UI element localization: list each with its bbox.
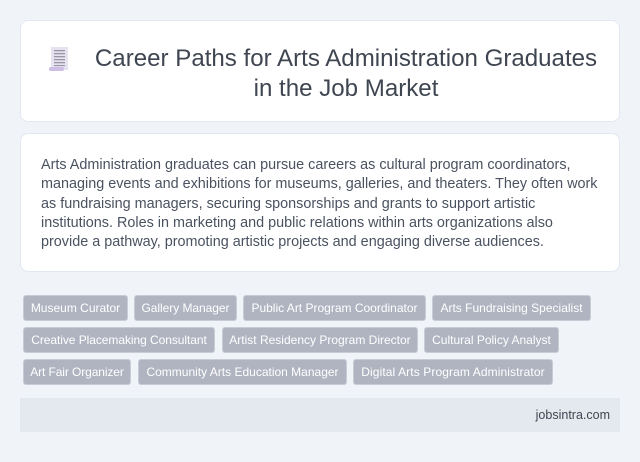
tag [138, 359, 347, 385]
tag: Creative Placemaking Consultant [31, 333, 207, 347]
tag: Public Art Program Coordinator [251, 301, 418, 315]
tag [243, 295, 426, 321]
tag: Cultural Policy Analyst [432, 333, 551, 347]
title: Career Paths for Arts Administration Graduates [95, 45, 597, 72]
tag [134, 295, 237, 321]
tag: Art Fair Organizer [30, 365, 124, 379]
tag [353, 359, 553, 385]
icon: document scroll [49, 47, 68, 71]
tag: Digital Arts Program Administrator [361, 365, 545, 379]
tag [23, 295, 128, 321]
tag list [23, 295, 591, 385]
panel: title card [20, 20, 620, 122]
tag: Gallery Manager [142, 301, 229, 315]
text block: description [41, 157, 598, 250]
text block: description: managing events and exhibitions for museums, galleries, and theaters. They often work [41, 176, 597, 192]
footer bar [20, 398, 620, 432]
tag: Museum Curator [31, 301, 120, 315]
title: in the Job Market [254, 75, 438, 102]
tag: Artist Residency Program Director [229, 333, 411, 347]
tag: Arts Fundraising Specialist [440, 301, 583, 315]
tag: Community Arts Education Manager [146, 365, 339, 379]
text block: description: institutions. Roles in marketing and public relations within arts organizations also [41, 215, 553, 231]
panel: description card [20, 133, 620, 272]
tag [23, 327, 215, 353]
footer text: jobsintra.com [536, 408, 610, 422]
tag [424, 327, 559, 353]
tag [23, 359, 131, 385]
text block: description: provide a pathway, promoting artistic projects and engaging diverse audiences. [41, 234, 544, 250]
text block: description: Arts Administration graduates can pursue careers as cultural program coordinators, [41, 157, 571, 173]
title [95, 45, 597, 102]
text block: description: as fundraising managers, securing sponsorships and grants to support artistic [41, 196, 535, 212]
tag [222, 327, 418, 353]
tag [432, 295, 591, 321]
